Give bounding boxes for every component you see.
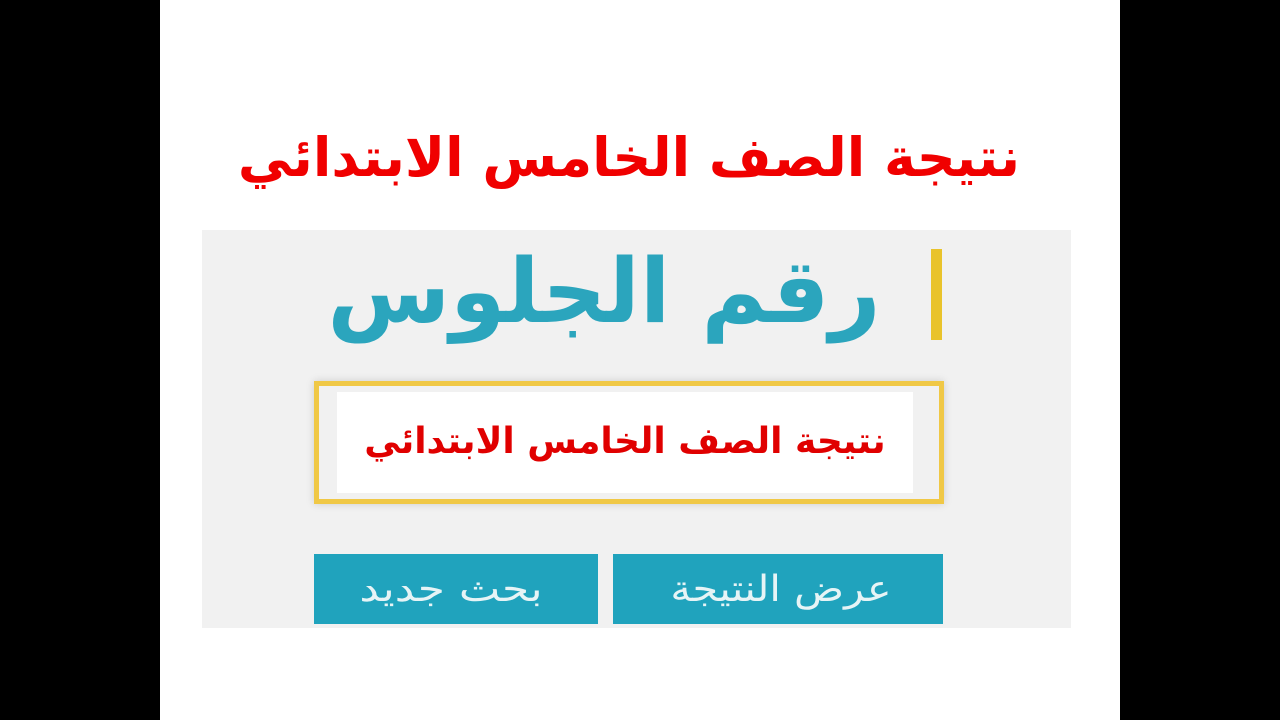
button: new search [314, 554, 598, 624]
form heading: رقم الجلوس [327, 239, 881, 343]
title: نتيجة الصف الخامس الابتدائي [238, 126, 1020, 189]
button: show result [613, 554, 943, 624]
input field [314, 381, 944, 504]
panel: search form [202, 230, 1071, 628]
show result label: عرض النتيجة [670, 569, 892, 610]
input text: نتيجة الصف الخامس الابتدائي [364, 421, 886, 462]
new search label: بحث جديد [359, 569, 543, 610]
accent bar [931, 249, 942, 340]
input inner box [337, 392, 913, 493]
white page area [160, 0, 1120, 720]
